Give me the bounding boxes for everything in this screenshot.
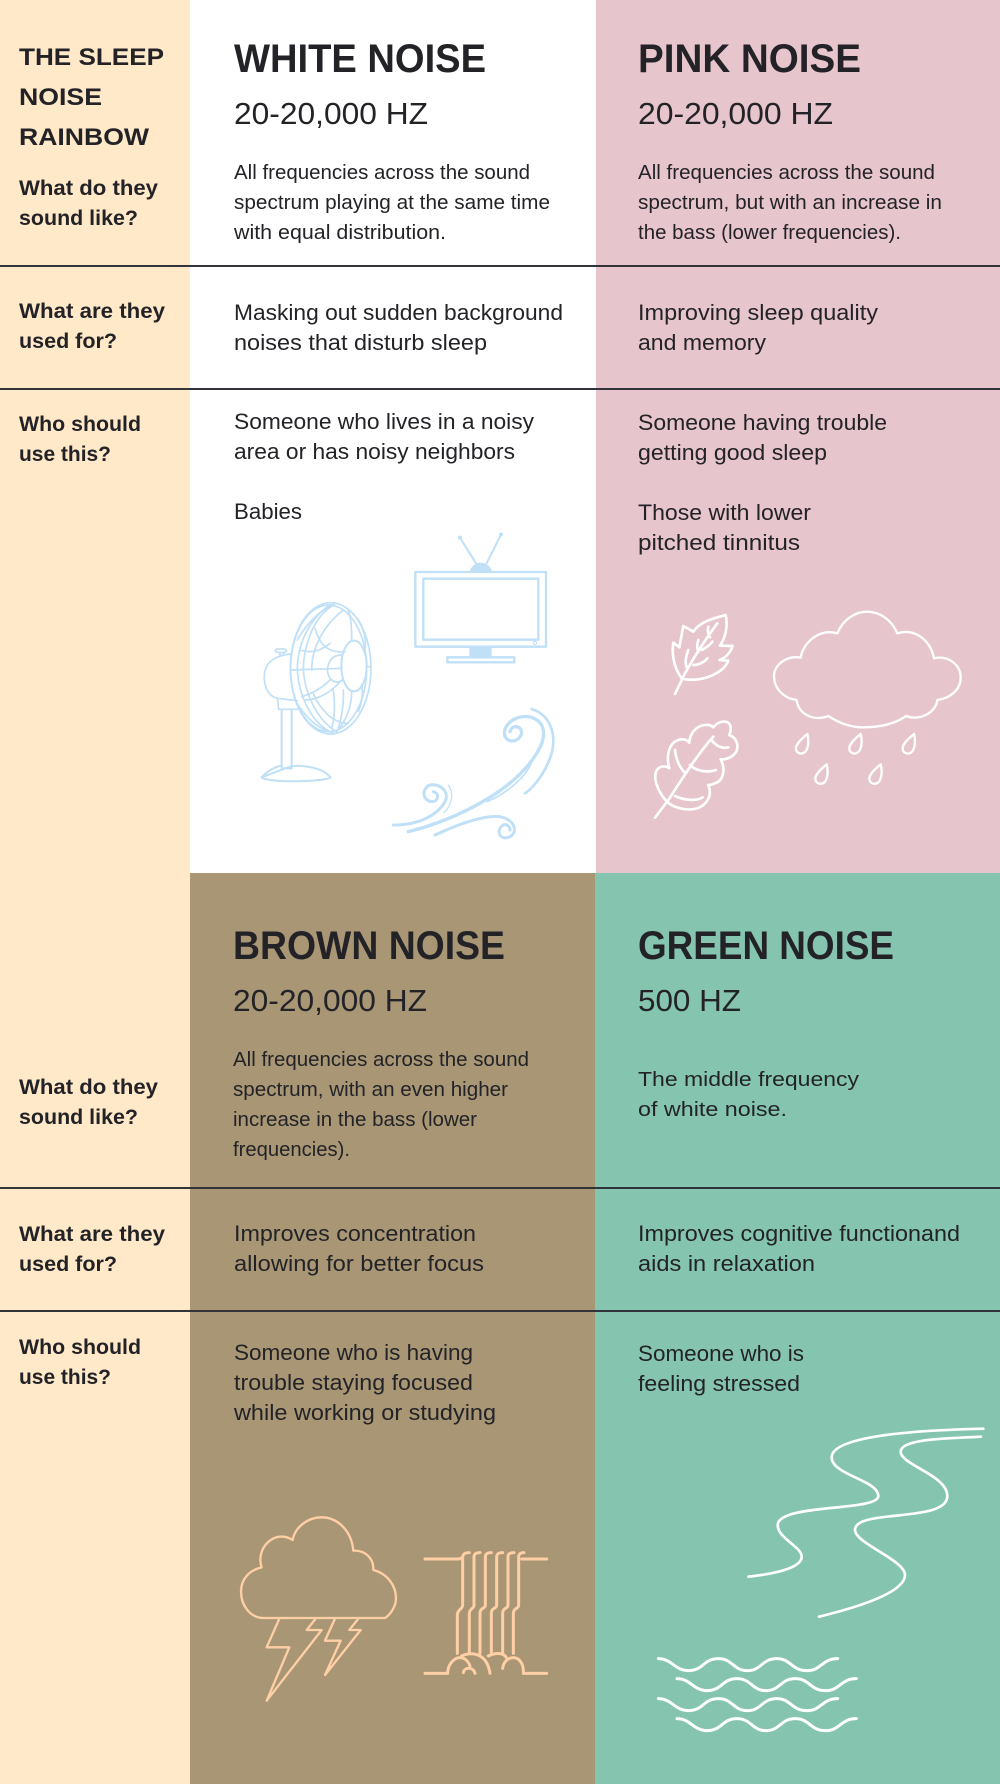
row label: who should use this, bottom [19, 1335, 141, 1389]
description: brown noise: increase in the bass (lower [233, 1109, 477, 1131]
audience: white noise: area or has noisy neighbors [234, 439, 515, 464]
icon: river [748, 1429, 983, 1617]
row label: what are they used for, top: What are they [19, 299, 165, 323]
icon: rain cloud [774, 612, 961, 784]
description: white noise: with equal distribution. [233, 222, 446, 244]
description: white noise: spectrum playing at the same time [234, 192, 550, 214]
audience: pink noise: getting good sleep [638, 440, 827, 465]
row label: what do they sound like, top: What do they [19, 176, 158, 200]
audience: pink noise: Those with lower [638, 500, 811, 525]
audience: white noise: Someone who lives in a noisy [234, 409, 534, 434]
row label: what do they sound like, bottom [19, 1075, 158, 1129]
frequency: brown noise: 20-20,000 HZ [233, 983, 427, 1018]
title: RAINBOW [19, 124, 149, 151]
uses: pink noise [638, 300, 878, 355]
title: NOISE [19, 84, 102, 111]
row label: what do they sound like, bottom: sound like? [19, 1105, 138, 1129]
audience: brown noise: trouble staying focused [234, 1370, 473, 1395]
uses: white noise: noises that disturb sleep [234, 330, 487, 355]
row label: what do they sound like, top [19, 176, 158, 230]
icon: thunder cloud [241, 1517, 396, 1701]
row label: what are they used for, bottom [19, 1222, 165, 1276]
panel: brown noise [190, 873, 595, 1784]
audience: green noise: Someone who is [638, 1341, 804, 1366]
description: brown noise: All frequencies across the sound [233, 1049, 529, 1071]
uses: brown noise: Improves concentration [234, 1221, 476, 1246]
description: pink noise: All frequencies across the sound [638, 162, 935, 184]
frequency: pink noise: 20-20,000 HZ [638, 96, 833, 131]
row label: what are they used for, top: used for? [19, 329, 117, 353]
heading: green noise: GREEN NOISE [638, 924, 894, 968]
frequency: green noise: 500 HZ [638, 983, 741, 1018]
description: pink noise: spectrum, but with an increase in [638, 192, 942, 214]
row label: who should use this, top [19, 412, 141, 466]
row label: who should use this, top: use this? [19, 442, 111, 466]
description: brown noise: frequencies). [233, 1139, 350, 1161]
audience: brown noise: while working or studying [233, 1400, 496, 1425]
row label: what are they used for, top [19, 299, 165, 353]
row label: what do they sound like, bottom: What do they [19, 1075, 158, 1099]
uses: white noise [234, 300, 563, 355]
description: white noise [233, 162, 550, 244]
row label: who should use this, bottom: use this? [19, 1365, 111, 1389]
description: green noise [638, 1069, 859, 1121]
icon: television [415, 533, 546, 662]
description: pink noise [638, 162, 942, 244]
row label: what are they used for, bottom: used for? [19, 1252, 117, 1276]
audience: pink noise: Someone having trouble [638, 410, 887, 435]
uses: pink noise: and memory [638, 330, 766, 355]
description: green noise: of white noise. [638, 1099, 787, 1121]
uses: white noise: Masking out sudden background [234, 300, 563, 325]
row label: what do they sound like, top: sound like? [19, 206, 138, 230]
icon: wind [393, 709, 553, 838]
description: brown noise [233, 1049, 529, 1161]
description: brown noise: spectrum, with an even higher [233, 1079, 508, 1101]
heading: white noise: WHITE NOISE [234, 37, 486, 81]
icon: leaf, lower [655, 722, 737, 818]
audience: brown noise [233, 1340, 496, 1425]
uses: pink noise: Improving sleep quality [638, 300, 878, 325]
description: white noise: All frequencies across the sound [234, 162, 530, 184]
icon: water waves [658, 1659, 856, 1731]
description: green noise: The middle frequency [638, 1069, 859, 1091]
audience: brown noise: Someone who is having [234, 1340, 473, 1365]
audience: green noise: feeling stressed [638, 1371, 800, 1396]
uses: green noise: aids in relaxation [638, 1251, 815, 1276]
uses: green noise [638, 1221, 960, 1276]
panel: green noise [595, 873, 1000, 1784]
title: THE SLEEP [19, 44, 164, 71]
uses: brown noise: allowing for better focus [234, 1251, 484, 1276]
audience: white noise: Babies [234, 499, 302, 524]
row label: who should use this, top: Who should [19, 412, 141, 436]
audience: green noise [638, 1341, 804, 1396]
panel: pink noise [596, 0, 1000, 873]
row label: who should use this, bottom: Who should [19, 1335, 141, 1359]
uses: brown noise [234, 1221, 484, 1276]
audience: white noise [234, 409, 534, 524]
heading: brown noise: BROWN NOISE [233, 924, 505, 968]
icon: waterfall [425, 1553, 547, 1673]
audience: pink noise [638, 410, 887, 555]
uses: green noise: Improves cognitive functionand [638, 1221, 960, 1246]
panel: white noise [190, 0, 596, 873]
icon: leaf, upper [673, 615, 733, 694]
audience: pink noise: pitched tinnitus [638, 530, 800, 555]
panel: left label column [0, 0, 190, 1784]
icon: fan [262, 603, 371, 781]
row label: what are they used for, bottom: What are they [19, 1222, 165, 1246]
frequency: white noise: 20-20,000 HZ [234, 96, 428, 131]
heading: pink noise: PINK NOISE [638, 37, 861, 81]
description: pink noise: the bass (lower frequencies). [638, 222, 901, 244]
title [19, 44, 164, 151]
